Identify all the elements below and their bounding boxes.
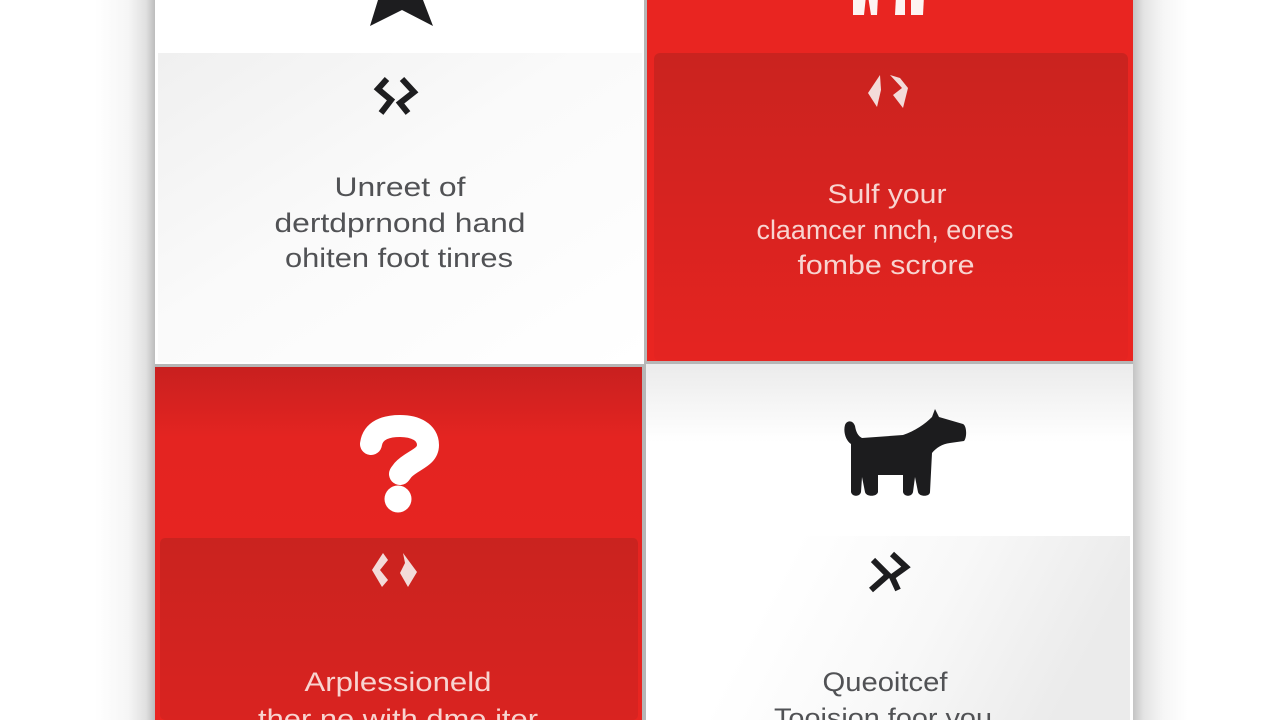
inner panel: bottom right [648, 536, 1130, 720]
text: top right [756, 179, 1014, 280]
text: top left: ohiten foot tinres [285, 243, 513, 273]
icon: chevrons top left [378, 79, 414, 113]
text: top left [274, 172, 526, 273]
inner panel: top right [654, 53, 1128, 361]
icon: chevrons bottom right [871, 554, 906, 590]
text: bottom right [774, 667, 992, 720]
text: bottom right: Queoitcef [822, 667, 948, 697]
text: bottom left: Arplessioneld [304, 667, 492, 697]
icon: chevrons bottom left [372, 553, 417, 587]
panel: top right card [647, 0, 1133, 361]
panel: bottom right card [646, 364, 1133, 720]
text: top left: dertdprnond hand [274, 208, 526, 238]
left shadow [95, 0, 155, 720]
icon: chevrons top right [868, 75, 908, 108]
icon: question mark [371, 426, 428, 512]
text: top right: fombe scrore [798, 250, 974, 280]
text: top right: claamcer nnch, eores [756, 215, 1014, 245]
icon: dog [844, 409, 966, 496]
panel: bottom left card [155, 367, 642, 720]
text: top left: Unreet of [334, 172, 466, 202]
icon: cropped legs [853, 0, 924, 15]
panel: top left card [155, 0, 644, 364]
inner panel: top left [158, 53, 642, 362]
right shadow [1133, 0, 1188, 720]
text: top right: Sulf your [828, 179, 946, 209]
icon: star [370, 0, 433, 26]
inner panel: bottom left [160, 538, 638, 720]
text: bottom left [258, 667, 538, 720]
grid gutter [155, 0, 1133, 720]
